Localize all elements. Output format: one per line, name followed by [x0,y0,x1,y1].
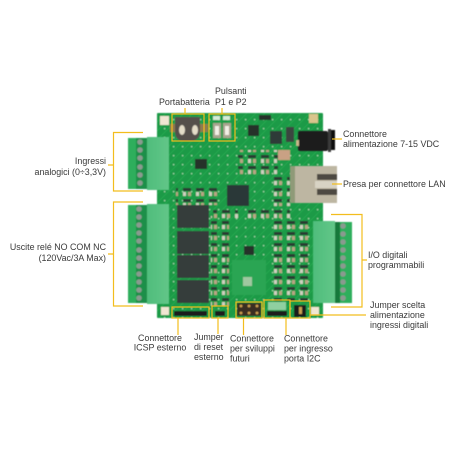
callout: analog inputs bracket [108,132,143,191]
digital I/O drivers [272,218,312,302]
label: reset jumper: Jumper [194,332,224,342]
buttons P1 P2 [213,116,231,138]
callout: buttons [209,108,235,141]
label: relay outputs: Uscite relé NO COM NC [10,242,107,252]
right terminal block: digital I/O [313,221,352,303]
expansion connector [237,303,261,316]
relays [177,205,209,303]
callout: relay outputs bracket [108,202,143,306]
label: expansion connector: futuri [230,354,250,364]
callout: LAN socket [332,183,342,185]
label: buttons: P1 e P2 [215,97,247,107]
callout: digital input jumper [290,301,366,318]
label: digital input jumper: ingressi digitali [370,320,428,330]
callout: I2C [264,300,290,335]
label: digital I/O: I/O digitali [368,250,407,260]
callout: reset jumper [212,306,228,334]
microcontroller [227,185,249,206]
label: power connector: Connettore [343,129,387,139]
callout: ICSP [172,307,209,335]
label: I2C connector: porta I2C [284,354,321,364]
digital input jumper [294,305,306,317]
label: relay outputs: (120Vac/3A Max) [39,253,106,263]
components [176,115,294,220]
power jack [296,129,335,152]
reset jumper [215,311,225,316]
callout: digital I/O bracket [331,214,367,307]
label: ICSP connector: Connettore [138,333,182,343]
label: expansion connector: per sviluppi [230,344,275,354]
battery holder [170,117,208,141]
label: digital I/O: programmabili [368,260,424,270]
label: I2C connector: Connettore [284,334,328,344]
I2C connector [267,302,287,316]
lower module [232,246,266,295]
label: battery holder: Portabatteria [159,97,210,107]
mounting holes [160,114,319,315]
label: digital input jumper: Jumper scelta [370,300,425,310]
left terminal block: analog inputs [128,137,169,190]
callout: battery holder [172,108,204,141]
callout lines [108,108,367,335]
label: analog inputs: analogici (0÷3,3V) [35,167,106,177]
ICSP connector [174,311,207,316]
label: LAN socket: Presa per connettore LAN [343,179,446,189]
circuit board [157,113,323,318]
LAN socket [290,166,337,203]
label: reset jumper: di reset [194,342,224,352]
label: ICSP connector: ICSP esterno [134,342,186,352]
callout: power connector [332,138,342,140]
label: I2C connector: per ingresso [284,344,333,354]
left terminal block: relay outputs [128,204,169,304]
label: digital input jumper: alimentazione [370,310,425,320]
label: analog inputs: Ingressi [75,156,106,166]
label: reset jumper: esterno [194,352,224,362]
label: power connector: alimentazione 7-15 VDC [343,139,440,149]
label: expansion connector: Connettore [230,334,274,344]
label: buttons: Pulsanti [215,86,247,96]
callout: expansion [236,302,262,335]
